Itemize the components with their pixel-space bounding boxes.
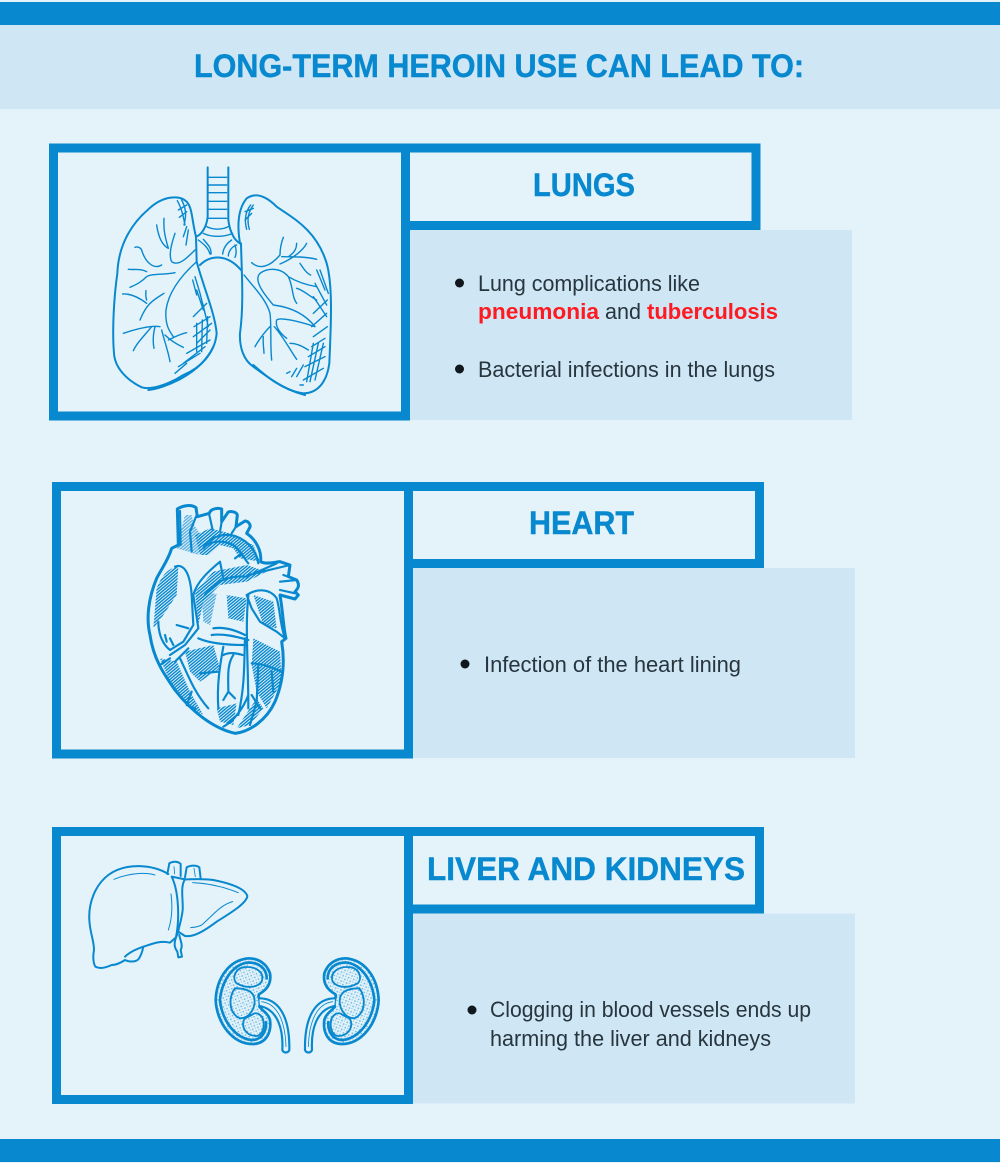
liver and kidneys text background bbox=[413, 914, 855, 1104]
icon: liver and kidneys bbox=[89, 862, 379, 1052]
lungs bullets: Bacterial infections in the lungs bbox=[478, 357, 775, 382]
heart bullet: Infection of the heart lining bbox=[484, 652, 741, 677]
lungs bullets: and bbox=[605, 299, 641, 324]
top bar bbox=[0, 2, 1000, 25]
icon: heart bbox=[148, 506, 298, 733]
lungs bullets: pneumonia bbox=[478, 299, 600, 324]
heart text background bbox=[413, 568, 855, 758]
icon: liver bbox=[89, 862, 247, 968]
title: LONG-TERM HEROIN USE CAN LEAD TO: bbox=[194, 48, 804, 84]
lungs bullets: Lung complications like bbox=[478, 271, 700, 296]
panel: lungs bbox=[54, 148, 852, 420]
header band bbox=[0, 25, 1000, 109]
lungs bullets: tuberculosis bbox=[647, 299, 778, 324]
lungs text background bbox=[410, 230, 852, 420]
lungs image frame bbox=[54, 148, 406, 416]
liver and kidneys image frame bbox=[56, 832, 408, 1100]
liver and kidneys bullet: harming the liver and kidneys bbox=[490, 1026, 771, 1051]
panel: heart bbox=[56, 486, 855, 758]
bottom bar bbox=[0, 1139, 1000, 1162]
icon: kidneys bbox=[216, 958, 379, 1052]
heart image frame bbox=[56, 486, 408, 754]
liver and kidneys heading box bbox=[408, 832, 760, 909]
liver and kidneys bullet: Clogging in blood vessels ends up bbox=[490, 997, 811, 1022]
lungs heading: LUNGS bbox=[533, 167, 635, 203]
icon: lungs bbox=[113, 167, 331, 395]
panel: liver and kidneys bbox=[56, 832, 855, 1104]
lungs bullets bbox=[455, 271, 778, 382]
liver and kidneys bullet bbox=[468, 997, 811, 1051]
heart heading: HEART bbox=[529, 505, 634, 541]
lungs heading box bbox=[406, 148, 756, 226]
heart heading box bbox=[408, 486, 760, 564]
liver and kidneys heading: LIVER AND KIDNEYS bbox=[427, 851, 745, 887]
